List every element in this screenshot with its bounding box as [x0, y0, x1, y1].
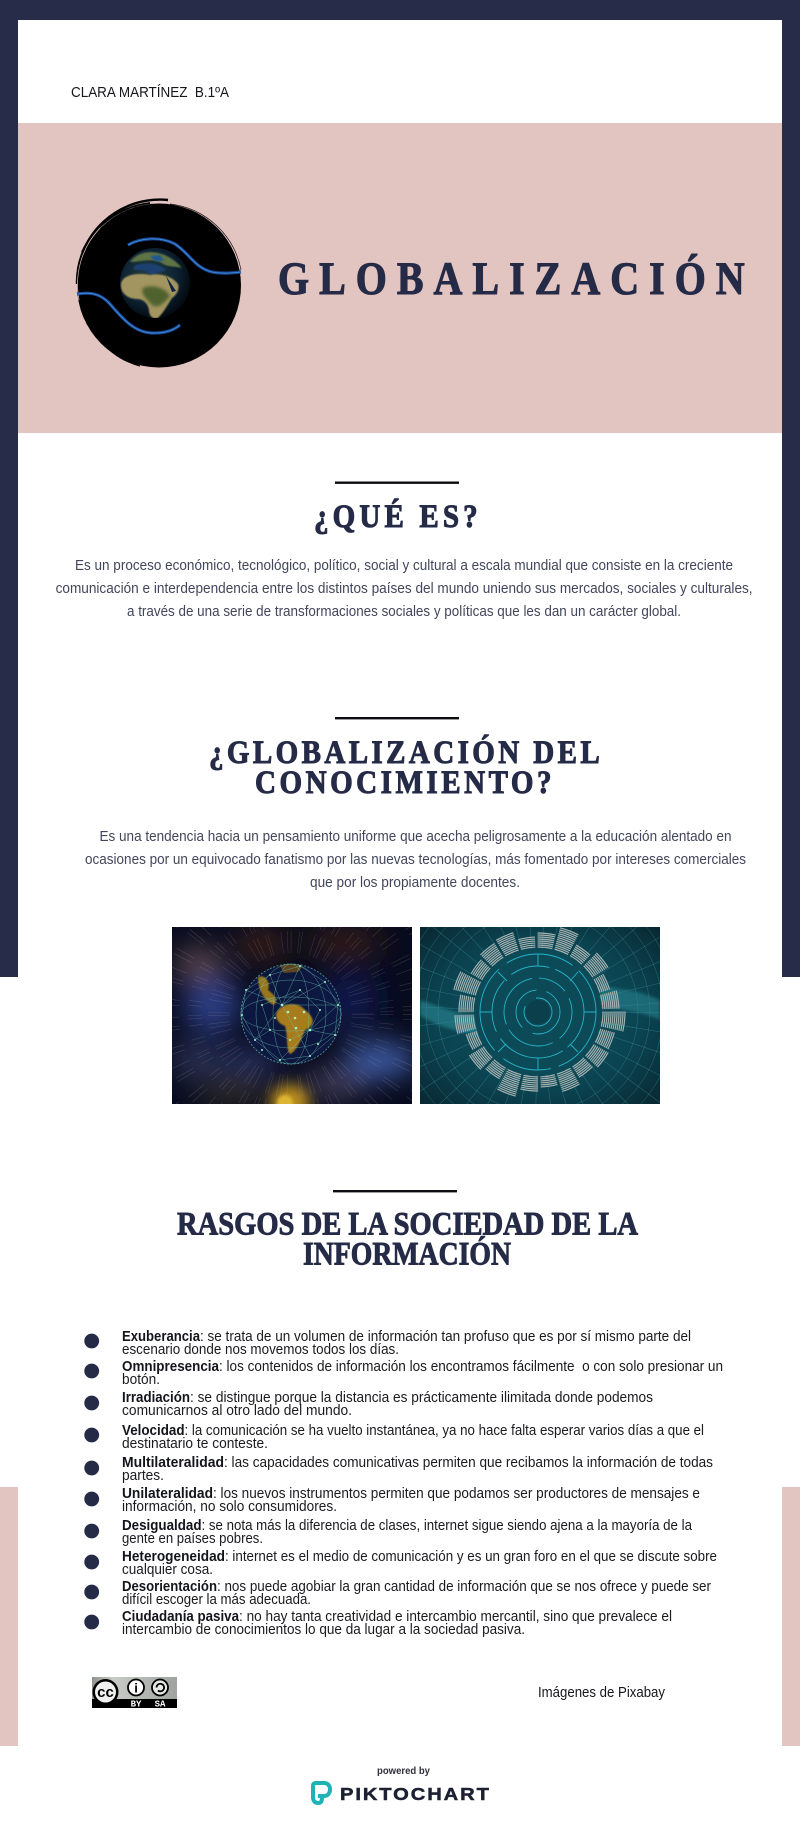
item 10: intercambio de conocimientos lo que da lugar a la sociedad pasiva. [122, 1622, 525, 1638]
teal waves [420, 1000, 480, 1038]
list: rasgos items [84, 1329, 723, 1638]
main title: GLOBALIZACIÓN [278, 252, 745, 305]
item 1 [84, 1329, 691, 1358]
item 5: Multilateralidad [122, 1455, 224, 1471]
network mesh [241, 964, 341, 1064]
heading: INFORMACIÓN [303, 1234, 511, 1272]
item 7: : se nota más la diferencia de clases, internet sigue siendo ajena a la mayoría de la [202, 1518, 693, 1534]
image credit: Imágenes de Pixabay [538, 1685, 666, 1701]
item 10: : no hay tanta creatividad e intercambio mercantil, sino que prevalece el [239, 1609, 672, 1625]
item 1: escenario donde nos movemos todos los días. [122, 1342, 399, 1358]
item 6 [84, 1486, 700, 1515]
item 7: Desigualdad [122, 1518, 202, 1534]
item 6: : los nuevos instrumentos permiten que podamos ser productores de mensajes e [213, 1486, 700, 1502]
item 1: : se trata de un volumen de información tan profuso que es por sí mismo parte del [200, 1329, 691, 1345]
item 6: Unilateralidad [122, 1486, 213, 1502]
radial grid [420, 927, 660, 1104]
item 10: Ciudadanía pasiva [122, 1609, 240, 1625]
heading: ¿QUÉ ES? [314, 497, 478, 534]
panel: title banner [18, 123, 782, 433]
section: que es [56, 482, 753, 620]
mediterranean [134, 263, 166, 275]
icon: creative commons badge: i [134, 1680, 138, 1696]
icon: piktochart logo [313, 1783, 330, 1803]
heading: CONOCIMIENTO? [255, 763, 552, 800]
item 2 [84, 1359, 723, 1388]
section: rasgos [177, 1190, 638, 1272]
item 8: : internet es el medio de comunicación y es un gran foro en el que se discute sobre [225, 1549, 717, 1565]
icon: creative commons badge [92, 1677, 177, 1710]
paragraph: comunicación e interdependencia entre los distintos países del mundo uniendo sus mercados, sociales y culturales, [56, 581, 753, 597]
item 4 [84, 1423, 704, 1452]
item 6: información, no solo consumidores. [122, 1499, 337, 1515]
item 8: Heterogeneidad [122, 1549, 225, 1565]
item 3: : se distingue porque la distancia es prácticamente ilimitada donde podemos [190, 1390, 653, 1406]
paragraph: Es un proceso económico, tecnológico, político, social y cultural a escala mundial que consiste en la creciente [75, 558, 733, 574]
americas landmass [258, 976, 276, 1005]
item 5: : las capacidades comunicativas permiten que recibamos la información de todas [224, 1455, 713, 1471]
heading: RASGOS DE LA SOCIEDAD DE LA [177, 1206, 638, 1242]
item 7 [84, 1518, 693, 1547]
icon: creative commons badge: SA [155, 1700, 166, 1710]
item 8 [84, 1549, 717, 1578]
item 8: cualquier cosa. [122, 1562, 213, 1578]
paragraph [85, 829, 746, 891]
item 9 [84, 1579, 711, 1608]
item 9: difícil escoger la más adecuada. [122, 1592, 311, 1608]
paragraph [56, 558, 753, 620]
item 2: botón. [122, 1372, 160, 1388]
icon: creative commons badge: cc [97, 1684, 114, 1701]
paragraph: que por los propiamente docentes. [310, 875, 520, 891]
item 4: Velocidad [122, 1423, 184, 1439]
item 5: partes. [122, 1468, 164, 1484]
europe landmass [130, 252, 182, 268]
item 9: : nos puede agobiar la gran cantidad de información que se nos ofrece y puede ser [217, 1579, 711, 1595]
heading [177, 1206, 638, 1272]
radial streaks [172, 927, 412, 1104]
network nodes [241, 965, 339, 1061]
icon: creative commons badge: BY [131, 1700, 142, 1710]
item 9: Desorientación [122, 1579, 217, 1595]
item 7: gente en países pobres. [122, 1531, 263, 1547]
paragraph: ocasiones por un equivocado fanatismo por las nuevas tecnologías, más fomentado por intereses comerciales [85, 852, 746, 868]
blue wave lines [77, 239, 241, 333]
image: network globe in space [172, 927, 412, 1104]
piktochart wordmark: PIKTOCHART [340, 1785, 489, 1805]
skyline ring [451, 925, 625, 1099]
item 4: : la comunicación se ha vuelto instantánea, ya no hace falta esperar varios días a que el [184, 1423, 704, 1439]
item 3: comunicarnos al otro lado del mundo. [122, 1403, 352, 1419]
heading: ¿GLOBALIZACIÓN DEL [209, 733, 600, 770]
paragraph: Es una tendencia hacia un pensamiento uniforme que acecha peligrosamente a la educación alentado en [100, 829, 732, 845]
circuit rings [480, 954, 596, 1070]
item 2: Omnipresencia [122, 1359, 220, 1375]
item 2: : los contenidos de información los encontramos fácilmente o con solo presionar un [219, 1359, 723, 1375]
africa landmass [121, 274, 179, 319]
item 5 [84, 1455, 713, 1484]
item 3: Irradiación [122, 1390, 190, 1406]
author name: CLARA MARTÍNEZ B.1ºA [71, 84, 229, 101]
image: digital city circle [420, 927, 660, 1104]
heading [209, 733, 600, 800]
navy page border [0, 0, 800, 977]
item 3 [84, 1390, 653, 1419]
item 1: Exuberancia [122, 1329, 201, 1345]
pink side strips [0, 1487, 800, 1746]
item 4: destinatario te conteste. [122, 1436, 268, 1452]
powered by: powered by [377, 1766, 430, 1777]
section: globalizacion del conocimiento [85, 717, 746, 891]
paragraph: a través de una serie de transformaciones sociales y políticas que les dan un carácter global. [127, 604, 681, 620]
item 10 [84, 1609, 672, 1638]
icon: earth in circle [77, 200, 241, 368]
